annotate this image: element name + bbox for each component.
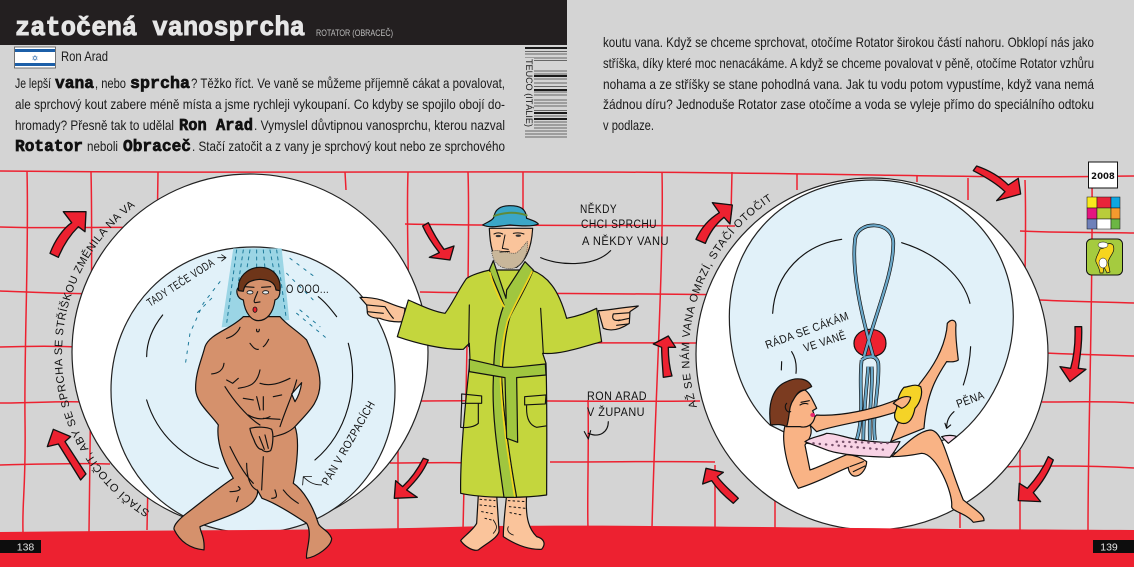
arcs: [773, 239, 971, 428]
hair: [770, 379, 812, 427]
page number right: [1093, 540, 1134, 554]
lips: [810, 413, 815, 417]
body text left column: ? Těžko říct. Ve vaně se můžeme příjemně cákat a povalovat,: [191, 75, 505, 91]
arrow: lower left: [47, 429, 86, 480]
head: [489, 228, 533, 267]
body text left column: vana: [55, 75, 94, 94]
face: [787, 390, 817, 427]
finger lines: [850, 462, 865, 472]
illustration: man under shower: [147, 248, 352, 558]
shower hose: [854, 225, 893, 440]
label: Ron Arad in robe: RON ARAD: [587, 391, 647, 403]
arrow: top centre: [423, 223, 454, 260]
flag of Israel: ✡: [32, 54, 38, 63]
robe belt: [469, 359, 546, 442]
label: sometimes shower sometimes bath: NĚKDY: [580, 203, 617, 216]
hands: [250, 427, 295, 452]
body text left column: sprcha: [130, 75, 190, 94]
arrow: right circle top right: [973, 166, 1021, 201]
gap beside arm: [292, 383, 302, 402]
monkey icon: [1086, 239, 1122, 275]
foam bubbles: [805, 433, 900, 457]
face lines: [494, 233, 524, 252]
red rotation arrows: [47, 166, 1086, 503]
speech curve and arrow: [541, 251, 611, 439]
arrow: right circle lower right: [1018, 457, 1053, 502]
bath capsule: inner blue space: [729, 180, 1013, 453]
robe collar and front: [489, 261, 533, 497]
designer name: Ron Arad: [61, 48, 108, 64]
barcode with country: [523, 48, 567, 137]
label: woman: VE VANĚ: [802, 329, 848, 355]
sponge: [895, 385, 922, 424]
head: [237, 267, 280, 321]
muscle lines: [212, 327, 298, 503]
curved label left: [54, 202, 149, 516]
legs and feet: [461, 495, 544, 550]
raised leg: [891, 320, 958, 442]
arrow: upper left: [50, 212, 86, 257]
label: water: TADY TEČE VODA: [145, 256, 217, 310]
right hand: [598, 306, 638, 330]
body text left column: ale sprchový kout zabere méně místa a jsme rychleji vykoupaní. Co kdyby se spojilo obojí do-: [15, 96, 505, 112]
body: [174, 317, 332, 558]
title: zatočená vanosprcha: [15, 14, 305, 44]
subtitle: ROTATOR (OBRACEČ): [316, 28, 393, 39]
label: foam: PĚNA: [955, 389, 986, 411]
beard: [492, 242, 527, 269]
flag of Israel: [14, 47, 56, 68]
sponge arm: [808, 398, 905, 432]
body text left column: neboli: [87, 138, 118, 154]
arrow: lower centre: [394, 458, 428, 498]
body text left column: [15, 75, 505, 157]
body text left column: Obraceč: [123, 138, 191, 157]
red floor: [0, 526, 1134, 567]
body text left column: . Vymyslel důvtipnou vanosprchu, kterou nazval: [254, 117, 505, 133]
label: woman: RÁDA SE CÁKÁM: [764, 310, 851, 352]
body text left column: Je lepší: [15, 75, 51, 91]
tile wall grid: [0, 171, 1134, 532]
arcs of motion: [147, 297, 352, 468]
body text right column: v podlaze.: [603, 117, 654, 133]
shower capsule: outer white shell: [72, 174, 428, 530]
body text right column: [603, 34, 1094, 133]
curved label right: AŽ SE NÁM VANA OMRZÍ, STAČÍ OTOČIT: [680, 194, 770, 408]
robe pockets: [461, 394, 546, 428]
year tag: 2008: [1091, 172, 1115, 182]
hat: [483, 206, 538, 227]
hand on sponge: [893, 397, 911, 408]
body text left column: hromady? Přesně tak to udělal: [15, 117, 174, 133]
arrow: right side: [1060, 327, 1086, 382]
title bar: [0, 0, 567, 45]
label: Ron Arad in robe: V ŽUPANU: [587, 406, 645, 419]
arrow: right circle lower left: [703, 468, 738, 503]
shower capsule: inner blue space: [111, 247, 395, 533]
upper body and back arm: [784, 422, 867, 488]
year tag: [1088, 162, 1118, 188]
water stream: [185, 248, 327, 367]
label: sometimes shower sometimes bath: CHCI SPRCHU: [581, 219, 657, 231]
illustration: Ron Arad in bathrobe: [360, 206, 638, 550]
body text left column: Rotator: [15, 138, 83, 157]
colour swatch grid: [1087, 197, 1120, 229]
body text left column: Ron Arad: [179, 117, 253, 136]
body text left column: . Stačí zatočit a z vany je sprchový kout nebo ze sprchového: [192, 138, 505, 154]
barcode with country: TEUCO (ITÁLIE): [523, 59, 534, 127]
left hand: [360, 297, 405, 322]
label arrows: [218, 255, 322, 485]
label: Ron Arad in robe: [587, 391, 647, 419]
eye and ear: [785, 401, 809, 412]
label: ooo: O OOO...: [286, 284, 329, 296]
label: sometimes shower sometimes bath: [580, 203, 669, 248]
label: man: PÁN V ROZPACÍCH: [319, 399, 378, 488]
label: sometimes shower sometimes bath: A NĚKDY VANU: [582, 235, 669, 248]
other leg: [892, 430, 984, 522]
page number left: [0, 540, 41, 554]
hat band: [494, 213, 527, 216]
arrow: up centre: [653, 336, 676, 377]
page number left: 138: [17, 542, 34, 554]
body text left column: , nebo: [95, 75, 126, 91]
bath capsule: outer white shell: [696, 178, 1048, 530]
foam in corner: [942, 435, 957, 443]
illustration: woman in bath: [770, 225, 984, 522]
arrow: right circle top left: [696, 203, 732, 243]
page number right: 139: [1100, 542, 1118, 554]
bathrobe: [397, 270, 602, 497]
